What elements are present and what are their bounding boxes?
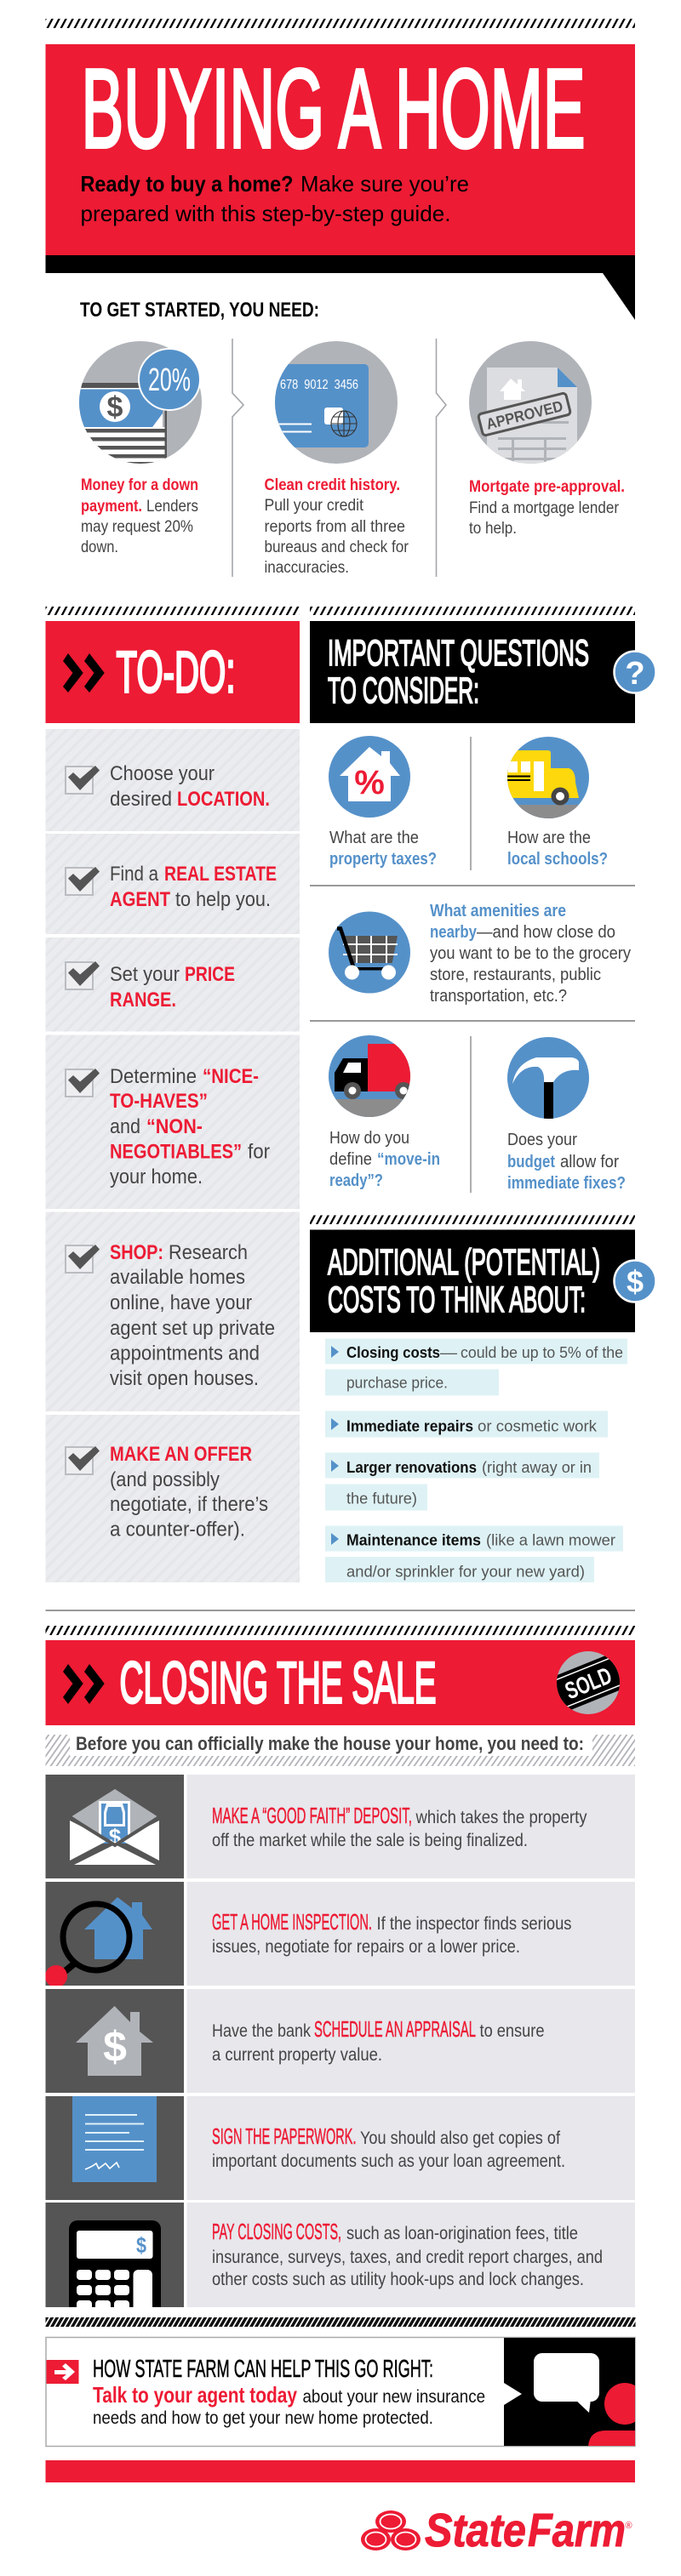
text: property taxes: property taxes?: [329, 850, 437, 869]
step: home inspection: issues, negotiate for repairs or a lower price.: [212, 1937, 520, 1957]
text: budget fixes: budget: [507, 1153, 555, 1171]
text: amenities: transportation, etc.?: [430, 987, 567, 1006]
logo: three rings: [361, 2510, 421, 2550]
text: local schools: local schools?: [507, 850, 608, 869]
panel: nice-to-haves: Determine: [110, 1065, 197, 1088]
step: appraisal: Have the bank: [212, 2021, 311, 2041]
text: amenities: nearby: [430, 923, 478, 942]
panel: how state farm can help: [46, 2338, 647, 2447]
icon: question mark: ?: [625, 656, 645, 692]
red footer bar: [46, 2460, 635, 2482]
text: mortgage pre-approval: to help.: [469, 520, 517, 538]
list: larger renovations: (right away or in: [482, 1459, 592, 1476]
icon: calculator: [69, 2220, 161, 2307]
panel: shop: agent set up private: [110, 1317, 275, 1340]
logo: State Farm: Farm: [528, 2504, 626, 2556]
text: local schools: How are the: [507, 829, 591, 847]
text: money for a down payment: may request 20%: [81, 518, 193, 536]
icon: property tax house: %: [354, 764, 385, 801]
hatched rule: top: [46, 19, 635, 28]
list: larger renovations: the future): [346, 1490, 417, 1507]
step: appraisal: SCHEDULE AN APPRAISAL: [314, 2016, 476, 2042]
text: property taxes: What are the: [329, 829, 419, 847]
text: money for a down payment: payment.: [81, 498, 142, 516]
text: property taxes: [329, 829, 437, 869]
panel: closing the sale banner: [46, 1640, 635, 1725]
text: money for a down payment: Money for a down: [81, 476, 198, 494]
icon: school bus: [507, 737, 589, 818]
icon: down payment money: [79, 341, 202, 465]
text: clean credit history: [264, 476, 409, 577]
panel: shop: [46, 1211, 300, 1411]
step: pay closing costs: such as loan-origination fees, title: [346, 2224, 578, 2243]
hatched rule: right column: [310, 607, 635, 615]
list: maintenance items: [325, 1526, 623, 1582]
text: move-in ready: How do you: [329, 1129, 409, 1148]
divider arrow 2: [436, 339, 446, 577]
text: amenities: you want to be to the grocery: [430, 944, 631, 963]
subheading: before you can officially: Before you can officially make the house your home, you need to:: [76, 1733, 584, 1754]
text: clean credit history: inaccuracies.: [264, 559, 349, 577]
list: maintenance items: (like a lawn mower: [486, 1531, 615, 1548]
step: pay closing costs: PAY CLOSING COSTS,: [212, 2219, 341, 2244]
panel: real estate agent: Find a: [110, 863, 159, 886]
panel: nice-to-haves: NEGOTIABLES”: [110, 1140, 242, 1164]
step: good faith deposit: off the market while the sale is being finalized.: [212, 1831, 528, 1850]
panel: price range: RANGE.: [110, 989, 176, 1012]
text: amenities: [430, 902, 631, 1006]
body text: Talk to your agent today: [93, 2382, 297, 2408]
panel: real estate agent: AGENT: [110, 888, 170, 911]
heading: how state farm can help: HOW STATE FARM CAN HELP THIS GO RIGHT:: [93, 2356, 433, 2383]
icon: house with dollar: [76, 2006, 153, 2076]
text: budget fixes: [507, 1131, 626, 1193]
text: move-in ready: define: [329, 1150, 372, 1169]
divider arrow 1: [232, 339, 243, 577]
step: good faith deposit: MAKE A “GOOD FAITH” DEPOSIT,: [212, 1803, 412, 1828]
logo: State Farm: ®: [625, 2521, 632, 2531]
intro text: prepared with this step-by-step guide.: [80, 201, 451, 226]
icon: dollar sign: [615, 1261, 655, 1302]
icon: signed document: [72, 2096, 157, 2182]
text: amenities: —and how close do: [477, 923, 615, 942]
icon: red arrow box: [46, 2360, 78, 2384]
text: amenities: What amenities are: [430, 902, 566, 920]
intro text: Ready to buy a home?: [80, 171, 293, 197]
step: home inspection: GET A HOME INSPECTION.: [212, 1909, 372, 1935]
panel: important questions header: TO CONSIDER:: [328, 670, 479, 711]
panel: nice-to-haves: for: [248, 1140, 270, 1164]
panel: choose location: desired: [110, 788, 172, 811]
text: money for a down payment: [81, 476, 198, 556]
icon: shopping cart: [329, 912, 410, 994]
panel: additional costs header: [310, 1230, 655, 1332]
panel: make an offer: [46, 1415, 300, 1582]
icon: house with dollar: $: [103, 2023, 127, 2071]
step: good faith deposit: which takes the property: [415, 1808, 587, 1827]
divider: questions row 2: [470, 1036, 472, 1193]
text: clean credit history: Pull your credit: [264, 497, 364, 515]
panel: important questions header: [310, 621, 655, 723]
panel: shop: visit open houses.: [110, 1367, 259, 1390]
heading: to-do: TO-DO:: [116, 640, 235, 704]
text: clean credit history: bureaus and check for: [264, 539, 409, 556]
icon: dollar sign: $: [627, 1264, 644, 1299]
divider: questions row 1: [470, 737, 472, 870]
text: mortgage pre-approval: [469, 478, 625, 538]
step: good faith deposit: [46, 1775, 635, 1878]
list: closing costs: [325, 1339, 627, 1395]
text: move-in ready: ready”?: [329, 1171, 383, 1190]
text: mortgage pre-approval: Find a mortgage lender: [469, 499, 620, 517]
icon: envelope with money: $: [109, 1824, 122, 1849]
list: maintenance items: Maintenance items: [346, 1531, 481, 1548]
panel: shop: appointments and: [110, 1342, 260, 1365]
icon: property tax house: [329, 736, 410, 818]
step: sign the paperwork: [46, 2096, 635, 2200]
panel: make an offer: (and possibly: [110, 1468, 220, 1491]
step: sign the paperwork: You should also get copies of: [360, 2129, 560, 2148]
text: mortgage pre-approval: Mortgate pre-approval.: [469, 478, 625, 496]
icon: double chevron: [63, 1664, 105, 1704]
intro text: Make sure you’re: [300, 171, 469, 197]
panel: choose location: LOCATION.: [177, 788, 270, 811]
panel: nice-to-haves: [46, 1034, 300, 1209]
body text: needs and how to get your new home protected.: [93, 2408, 433, 2428]
list: closing costs: could be up to 5% of the: [461, 1344, 623, 1361]
panel: shop: online, have your: [110, 1291, 252, 1314]
panel: shop: SHOP:: [110, 1241, 163, 1264]
panel: price range: Set your: [110, 963, 180, 986]
panel: nice-to-haves: “NICE-: [203, 1065, 259, 1088]
panel: price range: PRICE: [185, 963, 235, 986]
panel: make an offer: negotiate, if there’s: [110, 1493, 268, 1516]
panel: make an offer: a counter-offer).: [110, 1518, 245, 1542]
logo: State Farm: [361, 2504, 632, 2556]
panel: shop: available homes: [110, 1266, 245, 1289]
icon: question mark: [615, 652, 655, 692]
hatched rule: dense: [46, 2317, 635, 2327]
text: budget fixes: immediate fixes?: [507, 1174, 626, 1193]
step: appraisal: a current property value.: [212, 2045, 382, 2065]
text: money for a down payment: Lenders: [146, 498, 198, 516]
intro text: [80, 171, 469, 226]
icon: credit card: [269, 341, 398, 464]
list: immediate repairs: [325, 1411, 608, 1438]
header banner: [46, 44, 635, 320]
icon: sold badge: [557, 1651, 620, 1714]
panel: choose location: [46, 729, 300, 831]
icon: moving truck: [329, 1035, 410, 1117]
body text: [93, 2382, 485, 2428]
step: pay closing costs: [46, 2203, 635, 2307]
panel: to-do header: [46, 621, 300, 723]
hatched rule: left column: [46, 607, 300, 615]
text: move-in ready: “move-in: [377, 1150, 440, 1169]
step: sign the paperwork: important documents such as your loan agreement.: [212, 2151, 565, 2171]
step: sign the paperwork: SIGN THE PAPERWORK.: [212, 2123, 356, 2149]
list: larger renovations: Larger renovations: [346, 1459, 477, 1476]
step: appraisal: to ensure: [480, 2021, 545, 2041]
text: budget fixes: Does your: [507, 1131, 577, 1149]
icon: sold badge: SOLD: [561, 1662, 615, 1704]
hatched rule: closing: [46, 1626, 635, 1635]
step: home inspection: [45, 1882, 635, 1987]
text: clean credit history: reports from all three: [264, 518, 405, 536]
panel: nice-to-haves: “NON-: [146, 1115, 203, 1138]
icon: magnifier over house: [45, 1897, 152, 1987]
panel: price range: [46, 938, 300, 1031]
panel: nice-to-haves: TO-HAVES”: [110, 1090, 208, 1113]
icon: double chevron: [63, 653, 105, 692]
panel: real estate agent: REAL ESTATE: [164, 863, 277, 886]
icon: down payment money: $: [107, 391, 123, 424]
icon: envelope with money: [70, 1789, 159, 1865]
panel: nice-to-haves: and: [110, 1115, 140, 1138]
panel: real estate agent: [46, 834, 300, 934]
panel: choose location: Choose your: [110, 762, 215, 785]
text: money for a down payment: down.: [81, 539, 118, 556]
subheading: before you can officially: [46, 1733, 635, 1766]
icon: approved document: APPROVED: [484, 397, 564, 433]
step: pay closing costs: insurance, surveys, taxes, and credit report charges, and: [212, 2248, 603, 2267]
text: clean credit history: Clean credit history.: [264, 476, 400, 494]
icon: calculator: $: [136, 2232, 146, 2258]
step: pay closing costs: other costs such as utility hook-ups and lock changes.: [212, 2270, 584, 2289]
list: closing costs: Closing costs: [346, 1344, 440, 1361]
icon: approved document: [469, 341, 592, 468]
panel: make an offer: MAKE AN OFFER: [110, 1443, 252, 1466]
step: home inspection: If the inspector finds serious: [376, 1914, 572, 1934]
list: maintenance items: and/or sprinkler for your new yard): [346, 1564, 585, 1581]
text: budget fixes: allow for: [560, 1153, 619, 1171]
heading: closing the sale: CLOSING THE SALE: [119, 1650, 436, 1715]
text: move-in ready: [329, 1129, 440, 1190]
icon: credit card: 678 9012 3456: [280, 378, 358, 392]
text: local schools: [507, 829, 608, 869]
hatched rule: costs: [310, 1215, 635, 1224]
panel: shop: Research: [169, 1241, 248, 1264]
heading: to get started: TO GET STARTED, YOU NEED:: [80, 299, 319, 322]
panel: nice-to-haves: your home.: [110, 1165, 203, 1188]
list: closing costs: —: [440, 1344, 457, 1361]
list: closing costs: purchase price.: [346, 1375, 448, 1392]
list: immediate repairs: or cosmetic work: [478, 1417, 598, 1434]
list: immediate repairs: Immediate repairs: [346, 1417, 473, 1434]
icon: down payment money: 20%: [148, 362, 191, 398]
list: larger renovations: [325, 1453, 599, 1511]
text: amenities: store, restaurants, public: [430, 966, 601, 984]
logo: State Farm: State: [425, 2504, 526, 2556]
icon: hammer: [507, 1037, 589, 1125]
panel: real estate agent: to help you.: [175, 888, 271, 911]
body text: about your new insurance: [303, 2387, 485, 2407]
image: agent speech bubble: [504, 2338, 647, 2447]
step: appraisal: [46, 1989, 635, 2093]
